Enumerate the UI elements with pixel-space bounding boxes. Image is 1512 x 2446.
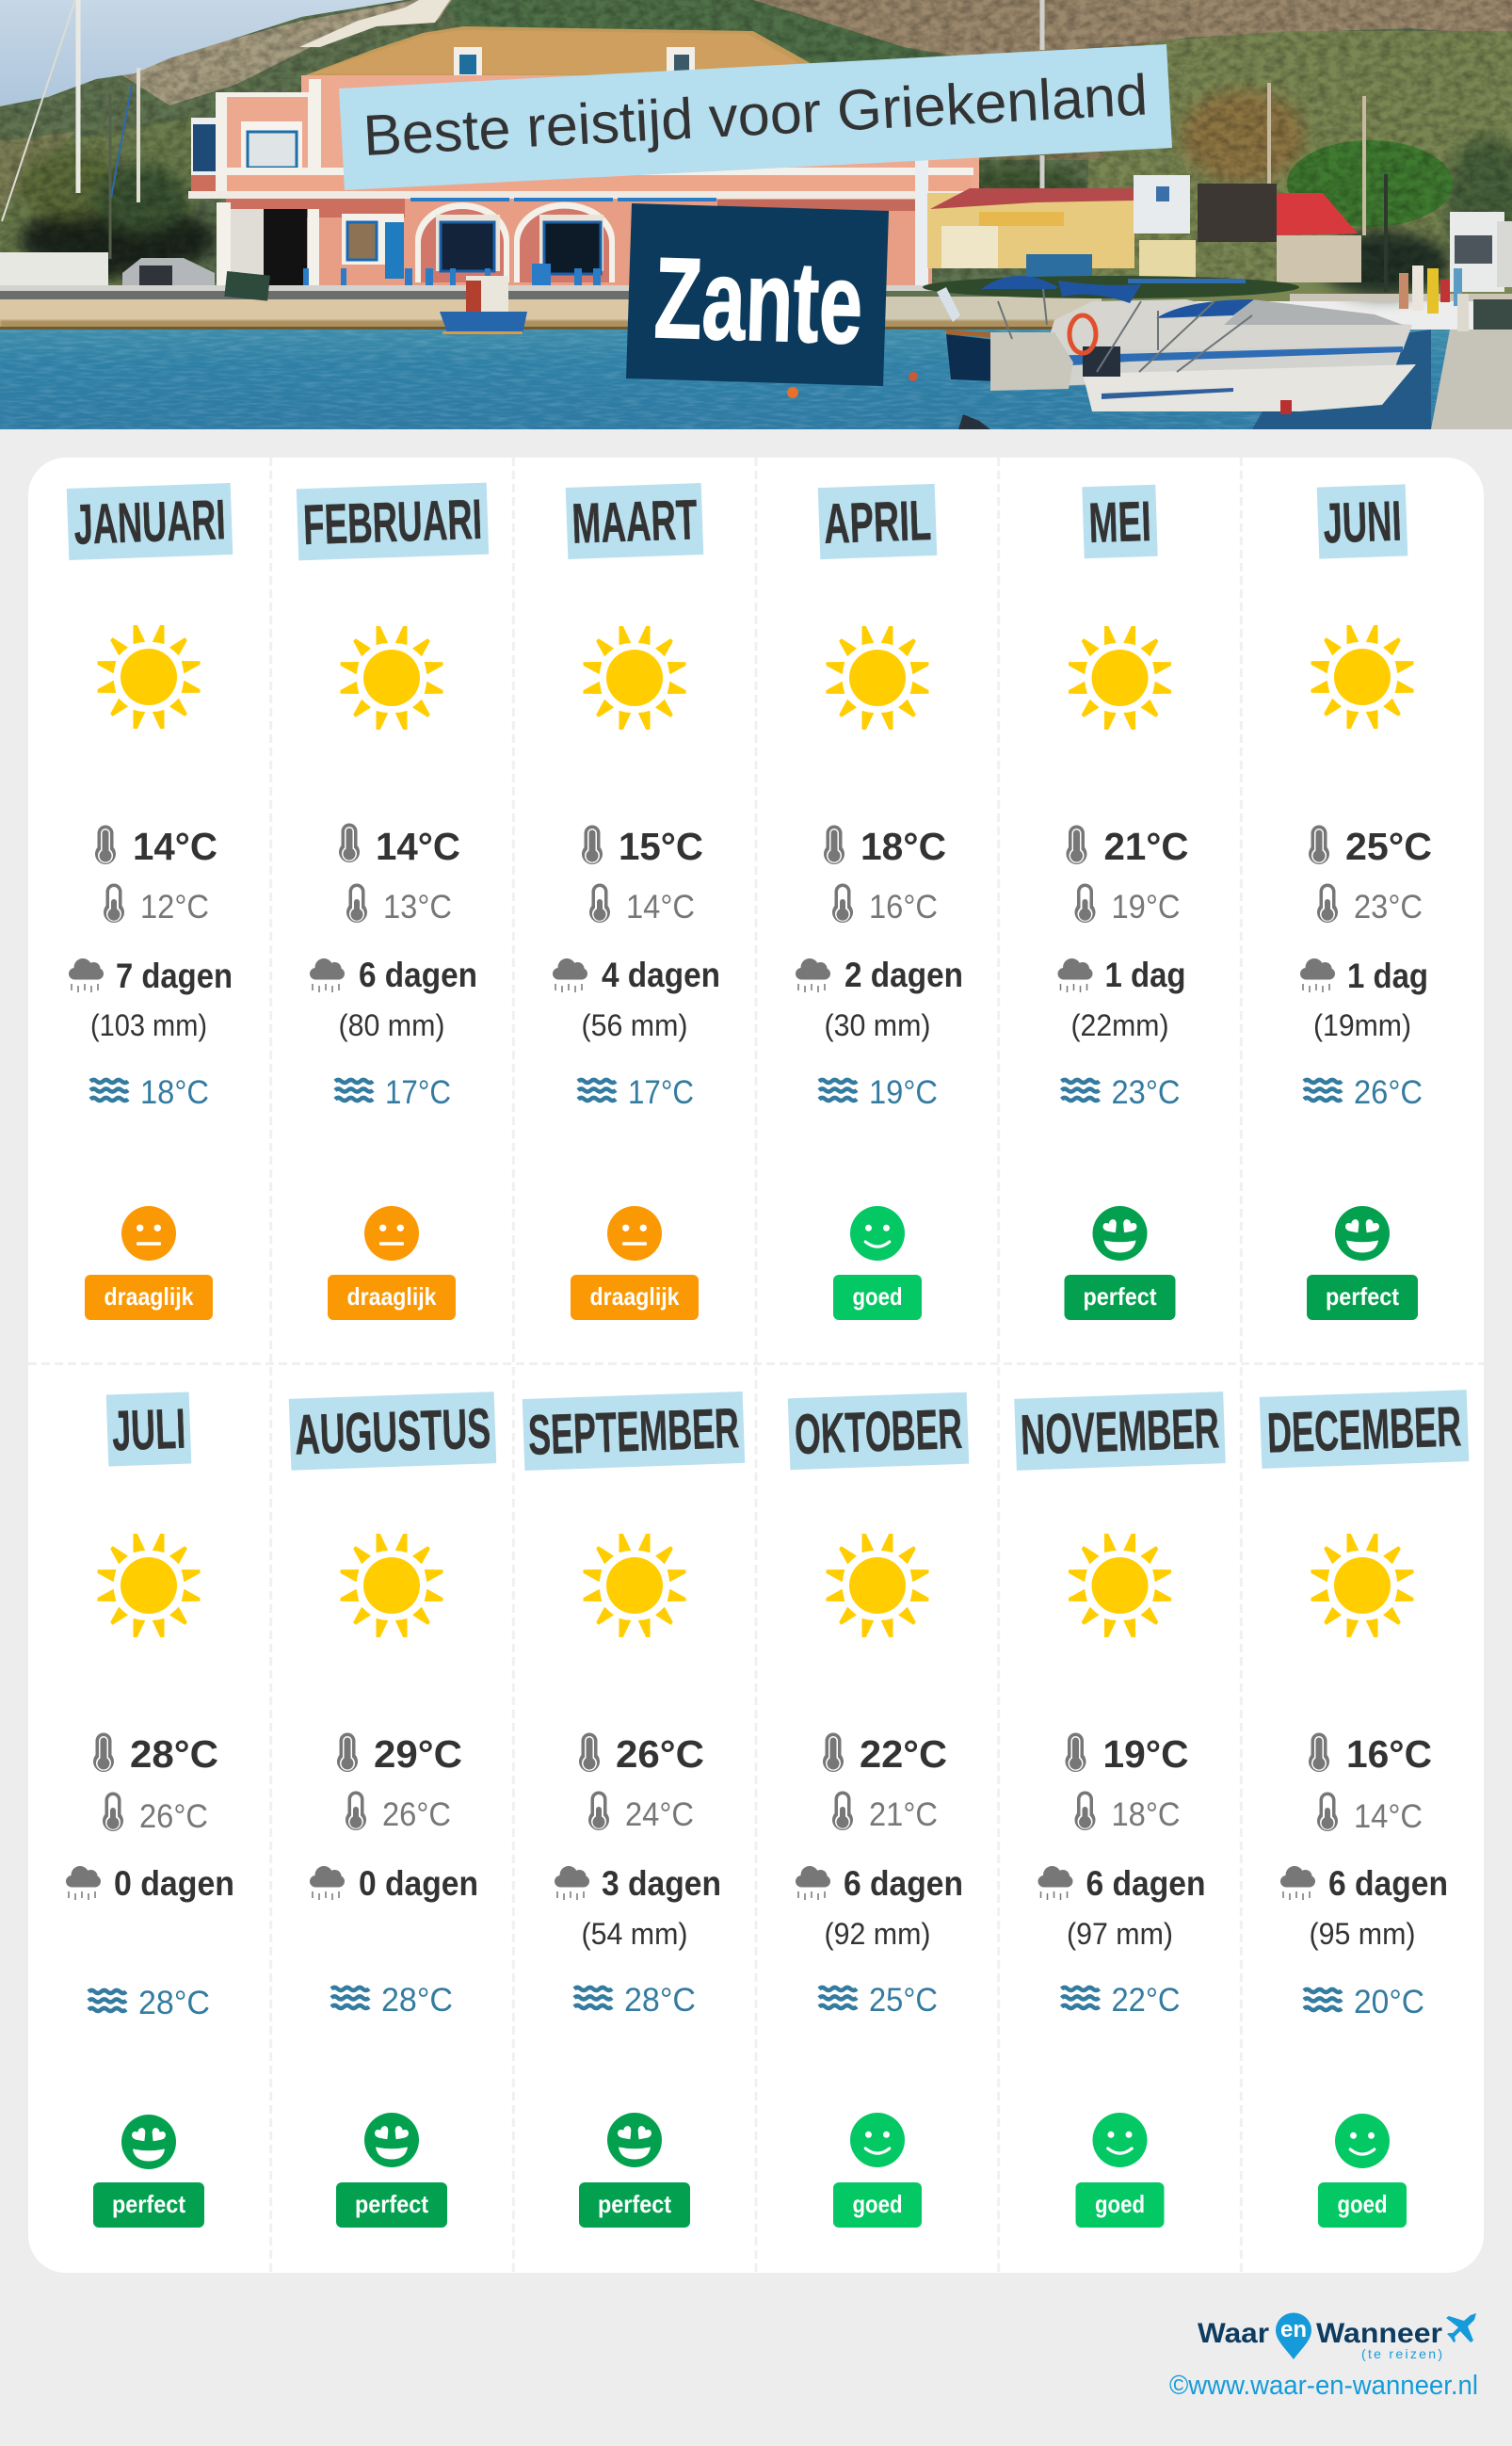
rating badge: draaglijk: [104, 1282, 194, 1311]
minimum temperature: 12°C: [140, 889, 209, 925]
icon: perfect face: [121, 2115, 176, 2169]
month heading: APRIL: [823, 489, 932, 555]
month heading: NOVEMBER: [1020, 1396, 1220, 1467]
water: [0, 330, 1512, 429]
rating badge: goed: [853, 2190, 902, 2218]
rating badge: perfect: [1326, 1282, 1399, 1311]
rainfall: (30 mm): [825, 1008, 930, 1042]
minimum temperature: 24°C: [625, 1796, 694, 1833]
rain days: [553, 956, 720, 994]
minimum temperature: 23°C: [1354, 889, 1423, 925]
icon: sun: [1070, 1535, 1171, 1636]
sea temperature: 23°C: [1111, 1074, 1181, 1111]
column: december: [1260, 1390, 1469, 2228]
rainfall: (103 mm): [90, 1008, 207, 1042]
logo: Waar en Wanneer: [1198, 2312, 1476, 2361]
rating badge: [579, 2182, 690, 2228]
maximum temperature: 15°C: [619, 825, 703, 868]
month heading: [289, 1392, 496, 1471]
rain days: [1300, 957, 1428, 995]
sea temperature: 18°C: [140, 1074, 209, 1111]
minimum temperature: 13°C: [383, 889, 452, 925]
rain days: 6 dagen: [1086, 1864, 1205, 1903]
maximum temperature: 21°C: [1103, 825, 1188, 868]
month heading: SEPTEMBER: [527, 1396, 740, 1467]
rainfall: (80 mm): [339, 1008, 444, 1042]
sea temperature: 17°C: [385, 1074, 451, 1111]
icon: perfect face: [607, 2113, 662, 2167]
rating badge: [336, 2182, 447, 2228]
rain days: [66, 1864, 234, 1903]
people on the quay: [1399, 266, 1462, 314]
minimum temperature: 26°C: [382, 1796, 451, 1833]
column: juni: [1300, 484, 1432, 1320]
icon: sun: [827, 1535, 928, 1636]
sea temperature: 17°C: [628, 1074, 694, 1111]
maximum temperature: [579, 1732, 704, 1776]
maximum temperature: 14°C: [133, 825, 217, 868]
maximum temperature: [93, 1732, 218, 1776]
destination label: Zante: [626, 203, 889, 386]
rating badge: [1318, 2182, 1407, 2228]
rating badge: [328, 1275, 456, 1320]
logo: Waar en Wanneer: en: [1280, 2317, 1307, 2342]
rain days: [1280, 1864, 1448, 1903]
rain days: 6 dagen: [844, 1864, 963, 1903]
maximum temperature: 18°C: [861, 825, 946, 868]
icon: sun: [1311, 625, 1413, 729]
month heading: [297, 483, 489, 560]
minimum temperature: 18°C: [1111, 1796, 1181, 1833]
sea temperature: [1062, 1982, 1181, 2019]
maximum temperature: [1066, 1732, 1188, 1776]
maximum temperature: [582, 825, 703, 868]
rating badge: [833, 1275, 922, 1320]
rain days: [796, 1864, 963, 1903]
rain days: 1 dag: [1105, 956, 1186, 994]
maximum temperature: 26°C: [616, 1732, 704, 1776]
rain days: 2 dagen: [844, 956, 963, 994]
icon: sun: [1311, 1535, 1413, 1636]
month heading: [818, 484, 937, 559]
sea temperature: [90, 1074, 209, 1111]
logo: Waar en Wanneer: (te reizen): [1361, 2346, 1442, 2361]
month heading: MAART: [571, 488, 699, 555]
sea temperature: 20°C: [1354, 1984, 1424, 2020]
maximum temperature: [1309, 1732, 1432, 1776]
minimum temperature: [346, 1791, 451, 1833]
panel: white card: [28, 458, 1484, 2273]
sea temperature: 28°C: [624, 1982, 696, 2019]
icon: sun: [584, 1535, 685, 1636]
rain days: 7 dagen: [116, 957, 233, 995]
minimum temperature: 21°C: [869, 1796, 938, 1833]
rain days: [310, 1864, 478, 1903]
column: september: [523, 1392, 745, 2228]
icon: perfect face: [1092, 1206, 1147, 1261]
rainfall: (95 mm): [1309, 1917, 1416, 1951]
month heading: JUNI: [1322, 490, 1403, 555]
minimum temperature: [346, 883, 452, 925]
month heading: FEBRUARI: [302, 488, 483, 556]
sea temperature: [335, 1074, 451, 1111]
month heading: [788, 1392, 969, 1470]
icon: neutral face: [121, 1206, 176, 1261]
month heading: AUGUSTUS: [294, 1396, 491, 1467]
minimum temperature: 19°C: [1111, 889, 1181, 925]
minimum temperature: [588, 1791, 694, 1833]
minimum temperature: 16°C: [869, 889, 938, 925]
maximum temperature: 16°C: [1346, 1732, 1432, 1776]
month heading: [1317, 484, 1407, 559]
rating badge: goed: [1337, 2190, 1388, 2218]
maximum temperature: 25°C: [1345, 825, 1432, 868]
month heading: JANUARI: [72, 488, 227, 556]
icon: map pin: [1276, 2312, 1311, 2359]
month heading: [1082, 485, 1158, 558]
rating badge: perfect: [355, 2190, 428, 2218]
sea temperature: [819, 1982, 938, 2019]
sky: [0, 0, 405, 106]
moored boats: [787, 276, 1416, 429]
icon: sun: [98, 625, 200, 729]
sea temperature: 25°C: [869, 1982, 938, 2019]
icon: neutral face: [364, 1206, 419, 1261]
column: maart: [553, 483, 720, 1320]
icon: perfect face: [364, 2113, 419, 2167]
cafe furniture: [303, 264, 601, 289]
icon: sun: [827, 627, 928, 729]
minimum temperature: [832, 1791, 938, 1833]
icon: airplane: [1446, 2313, 1476, 2342]
sea temperature: [1304, 1074, 1423, 1111]
icon: sun: [341, 1535, 442, 1636]
rain days: 3 dagen: [602, 1864, 721, 1903]
minimum temperature: [1317, 883, 1423, 925]
column: februari: [297, 483, 489, 1320]
icon: happy face: [1092, 2113, 1147, 2167]
masts and poles: [2, 0, 1386, 292]
maximum temperature: [824, 825, 946, 868]
minimum temperature: [1075, 1791, 1181, 1833]
month heading: [106, 1392, 191, 1467]
rain days: [1058, 956, 1186, 994]
rainfall: (54 mm): [582, 1917, 687, 1951]
icon: sun: [341, 627, 442, 729]
month heading: [67, 483, 233, 560]
rain days: 1 dag: [1347, 957, 1428, 995]
maximum temperature: [337, 1732, 462, 1776]
sea temperature: [331, 1982, 453, 2019]
rain days: 6 dagen: [359, 956, 477, 994]
icon: sun: [1070, 627, 1171, 729]
month heading: [1014, 1392, 1226, 1471]
building: [188, 26, 979, 287]
minimum temperature: [104, 883, 209, 925]
sea temperature: 28°C: [138, 1985, 210, 2021]
maximum temperature: 29°C: [374, 1732, 462, 1776]
vehicles, left: [0, 252, 215, 288]
column: januari: [67, 483, 233, 1320]
column: augustus: [289, 1392, 496, 2228]
rain days: [1037, 1864, 1205, 1903]
title banner: [339, 44, 1172, 190]
pier: [1431, 294, 1512, 429]
column: juli: [66, 1392, 234, 2228]
rainfall: (22mm): [1071, 1008, 1169, 1042]
maximum temperature: [1066, 825, 1188, 868]
rating badge: [833, 2182, 922, 2228]
rating badge: goed: [1095, 2190, 1145, 2218]
icon: sun: [584, 627, 685, 729]
rainfall: (92 mm): [825, 1917, 930, 1951]
month heading: [566, 483, 703, 559]
sea temperature: 22°C: [1111, 1982, 1181, 2019]
rain days: [796, 956, 963, 994]
rain days: [69, 957, 233, 995]
hero photo: harbour of Zante: [0, 0, 1512, 429]
trees behind the town: [19, 89, 1512, 297]
icon: sun: [98, 1535, 200, 1636]
month heading: JULI: [111, 1397, 186, 1462]
minimum temperature: [832, 883, 938, 925]
maximum temperature: 22°C: [860, 1732, 947, 1776]
right side buildings: [923, 175, 1512, 301]
maximum temperature: [95, 825, 217, 868]
maximum temperature: 14°C: [376, 825, 460, 868]
column: april: [796, 484, 963, 1320]
rain days: 6 dagen: [1328, 1864, 1448, 1903]
rating badge: perfect: [112, 2190, 185, 2218]
month heading: [523, 1392, 745, 1471]
rating badge: [85, 1275, 213, 1320]
rating badge: goed: [853, 1282, 902, 1311]
minimum temperature: 14°C: [626, 889, 695, 925]
icon: neutral face: [607, 1206, 662, 1261]
icon: happy face: [850, 2113, 905, 2167]
rain days: [555, 1864, 721, 1903]
minimum temperature: 14°C: [1354, 1798, 1423, 1835]
maximum temperature: [823, 1732, 947, 1776]
sea temperature: [819, 1074, 938, 1111]
rating badge: [1307, 1275, 1418, 1320]
sea temperature: 19°C: [869, 1074, 938, 1111]
rainfall: (19mm): [1313, 1008, 1411, 1042]
rain days: 0 dagen: [359, 1864, 478, 1903]
minimum temperature: [589, 883, 695, 925]
icon: perfect face: [1335, 1206, 1390, 1261]
rainfall: (56 mm): [582, 1008, 687, 1042]
mountains: [0, 0, 1512, 301]
maximum temperature: 19°C: [1103, 1732, 1188, 1776]
rain days: [310, 956, 477, 994]
small blue fishing boat: [440, 276, 527, 334]
rating badge: [93, 2182, 204, 2228]
month heading: OKTOBER: [794, 1397, 963, 1466]
sea temperature: 26°C: [1354, 1074, 1423, 1111]
sea temperature: [1304, 1984, 1424, 2020]
title banner: Beste reistijd voor Griekenland: [362, 62, 1150, 168]
sea temperature: [578, 1074, 694, 1111]
minimum temperature: [103, 1793, 208, 1835]
rating badge: [1064, 1275, 1175, 1320]
logo: Waar en Wanneer: Waar: [1198, 2318, 1269, 2349]
road and quay: [0, 271, 1102, 330]
logo: Waar en Wanneer: Wanneer: [1316, 2318, 1442, 2349]
rating badge: [571, 1275, 699, 1320]
rain days: 0 dagen: [114, 1864, 234, 1903]
website credit: ©www.waar-en-wanneer.nl: [1169, 2371, 1478, 2401]
month heading: MEI: [1087, 490, 1152, 555]
minimum temperature: [1075, 883, 1181, 925]
maximum temperature: [339, 823, 460, 868]
column: november: [1014, 1392, 1226, 2228]
icon: happy face: [850, 1206, 905, 1261]
destination label: Zante: Zante: [652, 233, 864, 368]
sea temperature: [88, 1985, 210, 2021]
sea temperature: [1062, 1074, 1181, 1111]
rating badge: draaglijk: [346, 1282, 437, 1311]
maximum temperature: 28°C: [130, 1732, 218, 1776]
icon: happy face: [1335, 2114, 1390, 2168]
column: oktober: [788, 1392, 969, 2228]
rating badge: perfect: [598, 2190, 671, 2218]
rating badge: draaglijk: [589, 1282, 680, 1311]
minimum temperature: [1317, 1793, 1423, 1835]
rating badge: perfect: [1083, 1282, 1157, 1311]
rainfall: (97 mm): [1067, 1917, 1173, 1951]
sea temperature: [574, 1982, 696, 2019]
minimum temperature: 26°C: [139, 1798, 208, 1835]
maximum temperature: [1309, 825, 1432, 868]
rain days: 4 dagen: [602, 956, 720, 994]
sea temperature: 28°C: [381, 1982, 453, 2019]
column: mei: [1058, 485, 1188, 1320]
rating badge: [1075, 2182, 1164, 2228]
